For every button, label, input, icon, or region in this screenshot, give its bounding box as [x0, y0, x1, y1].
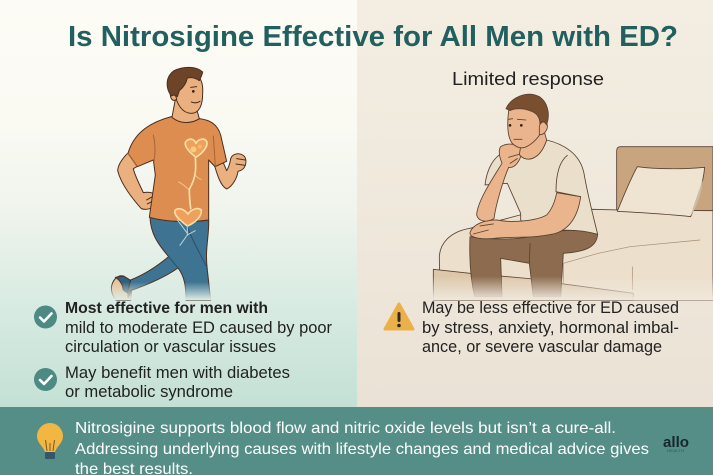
panel: bottom banner — [0, 407, 713, 475]
icon: warning triangle — [385, 304, 413, 329]
ear — [539, 122, 547, 135]
text block: most effective — [65, 300, 332, 356]
trousers — [470, 230, 598, 297]
text block: less effective — [422, 299, 679, 356]
headboard — [617, 147, 713, 211]
right arm and fist — [215, 154, 246, 189]
text block: may benefit — [65, 364, 290, 401]
subheading: limited response: Limited response — [452, 68, 604, 89]
neck — [519, 123, 547, 159]
head — [174, 75, 203, 113]
illustration: running man with glowing heart and vessels — [111, 67, 246, 300]
glow heart upper — [175, 139, 207, 226]
bed base — [433, 269, 633, 300]
text block: most effective: mild to moderate ED caused by poor — [65, 319, 332, 337]
text block: most effective: Most effective for men with — [65, 300, 268, 317]
icon: check badge 1 — [34, 306, 57, 328]
fade: runner legs fade — [105, 282, 235, 300]
title: Is Nitrosigine Effective for All Men with ED? — [68, 21, 678, 53]
logo: allo health: allo — [663, 434, 689, 451]
jeans — [128, 217, 211, 300]
shirt — [128, 117, 227, 222]
back foot — [111, 276, 132, 300]
torso and shirt — [485, 140, 598, 234]
text block: may benefit: or metabolic syndrome — [65, 383, 233, 401]
icon: light bulb — [37, 423, 63, 459]
panel: right background — [357, 0, 713, 407]
mattress — [439, 209, 713, 300]
head — [508, 100, 545, 148]
left arm and fist — [118, 152, 159, 209]
text block: less effective: ance, or severe vascular damage — [422, 338, 662, 356]
icon: check badge 2 — [34, 368, 57, 391]
text block: banner message — [75, 420, 649, 475]
text block: less effective: May be less effective for ED caused — [422, 299, 679, 317]
neck — [172, 99, 199, 123]
ear — [170, 92, 177, 100]
illustration: thoughtful man seated on bed — [433, 94, 713, 300]
fade: seated man bottom fade — [432, 276, 713, 300]
text block: most effective: circulation or vascular issues — [65, 338, 276, 356]
text block: less effective: by stress, anxiety, hormonal imbal- — [422, 319, 679, 337]
right arm — [470, 193, 581, 239]
hair — [506, 94, 548, 125]
panel: left background — [0, 0, 357, 407]
text block: banner message: Nitrosigine supports blood flow and nitric oxide levels but isn’t a cure-all. — [75, 420, 616, 437]
logo: allo health: HEALTH — [667, 449, 685, 453]
text block: banner message: Addressing underlying causes with lifestyle changes and medical advice gives — [75, 441, 649, 458]
left arm and hand at chin — [477, 144, 522, 221]
pillow — [617, 167, 705, 217]
text block: may benefit: May benefit men with diabetes — [65, 364, 290, 382]
hair — [167, 67, 203, 97]
